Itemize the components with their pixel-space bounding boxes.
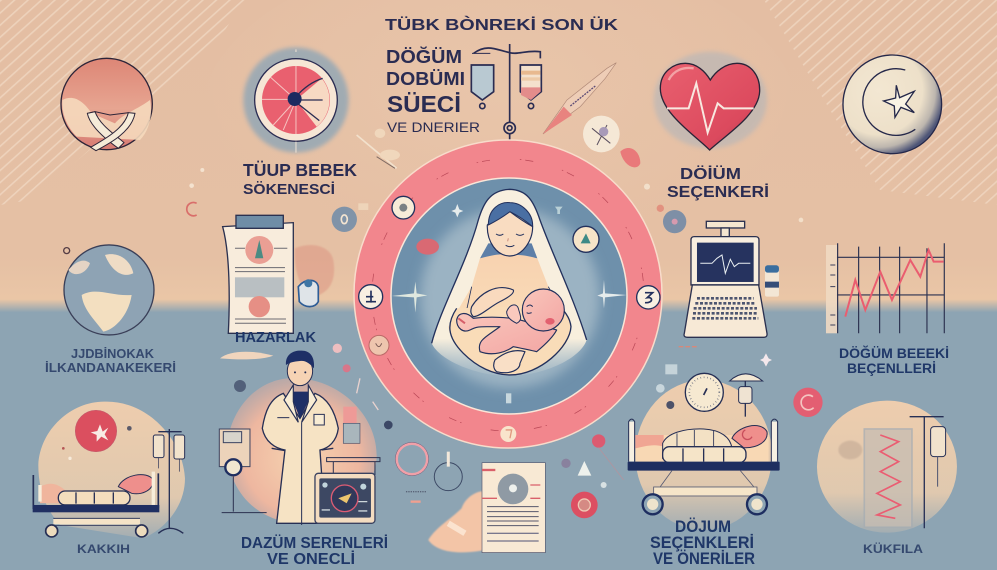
label: birth options top xyxy=(667,166,769,201)
chart: line chart xyxy=(826,243,944,333)
label: tube baby: TÜUP BEBEK xyxy=(243,160,357,180)
icons: rings xyxy=(395,442,462,502)
globe label xyxy=(45,346,176,375)
document xyxy=(482,463,545,553)
label: preparation: HAZARLAK xyxy=(235,329,316,346)
icon: crescent and star xyxy=(843,55,942,154)
panel: right chart circle xyxy=(817,401,957,533)
label: tube baby xyxy=(243,160,357,198)
icon: test tube cell wheel xyxy=(243,47,349,153)
heading: process title block: DOBÜMI xyxy=(386,68,465,89)
illustration: mother and baby xyxy=(432,189,587,376)
icon: small decorations near title xyxy=(64,129,400,254)
label: birth options and advice: VE ÖNERİLER xyxy=(653,549,755,568)
label: doctor options: DAZÜM SERENLERİ xyxy=(241,533,388,552)
right decorations xyxy=(583,116,803,233)
label: birth babies: DÖĞÜM BEEEKİ xyxy=(839,346,949,361)
label: birth babies xyxy=(839,346,949,376)
icon: syringe xyxy=(543,63,616,134)
label: doctor options: VE ONECLİ xyxy=(267,550,355,568)
icon: globe xyxy=(64,245,154,335)
icon: ribbon ball xyxy=(61,58,152,151)
equipment cart xyxy=(219,429,267,513)
heading: process title block: DÖĞÜM xyxy=(386,46,462,67)
heading: process title block: VE DNERIER xyxy=(387,119,480,135)
globe label: JJDBİNOKAK xyxy=(71,346,154,361)
label: tube baby: SÖKENESCİ xyxy=(243,181,335,198)
label: doctor options xyxy=(241,533,388,568)
iv lamp xyxy=(730,374,763,417)
bed xyxy=(628,419,780,514)
panel: doctor xyxy=(219,344,393,525)
doctor figure xyxy=(262,351,338,525)
label: left bed: KAKKIH xyxy=(77,544,130,556)
panel: patient bed left xyxy=(33,402,185,538)
ring medallions xyxy=(359,196,660,442)
icon: clipboard document xyxy=(223,215,293,333)
label: birth options top: SEÇENKERİ xyxy=(667,184,769,201)
panel: right patient bed xyxy=(628,373,780,530)
icon: iv stand xyxy=(471,44,541,175)
heading: process title block xyxy=(386,46,480,135)
icon: stethoscope and stain xyxy=(295,245,334,307)
label: birth options and advice xyxy=(650,517,755,568)
title: TÜBK BÒNREKİ SON ÜK xyxy=(385,16,619,34)
small icons by right bed xyxy=(561,347,823,518)
icon: heart xyxy=(654,52,767,150)
heading: process title block: SÜECİ xyxy=(387,91,461,117)
icon: computer monitor xyxy=(684,221,779,337)
label: birth options and advice: DÖJUM xyxy=(675,517,731,536)
illustration: hand holding document xyxy=(428,491,493,552)
shelf xyxy=(327,407,380,475)
central ring xyxy=(354,140,662,448)
tablet xyxy=(315,473,375,523)
label: right circle: KÜKFILA xyxy=(863,543,923,556)
label: birth options and advice: SEÇENKLERİ xyxy=(650,534,754,552)
label: birth options top: DÖİÜM xyxy=(680,166,741,183)
gauge xyxy=(685,373,723,411)
globe label: İLKANDANAKEKERİ xyxy=(45,360,176,375)
inner sparkles xyxy=(392,204,627,403)
label: birth babies: BEÇENLLERİ xyxy=(847,361,936,376)
